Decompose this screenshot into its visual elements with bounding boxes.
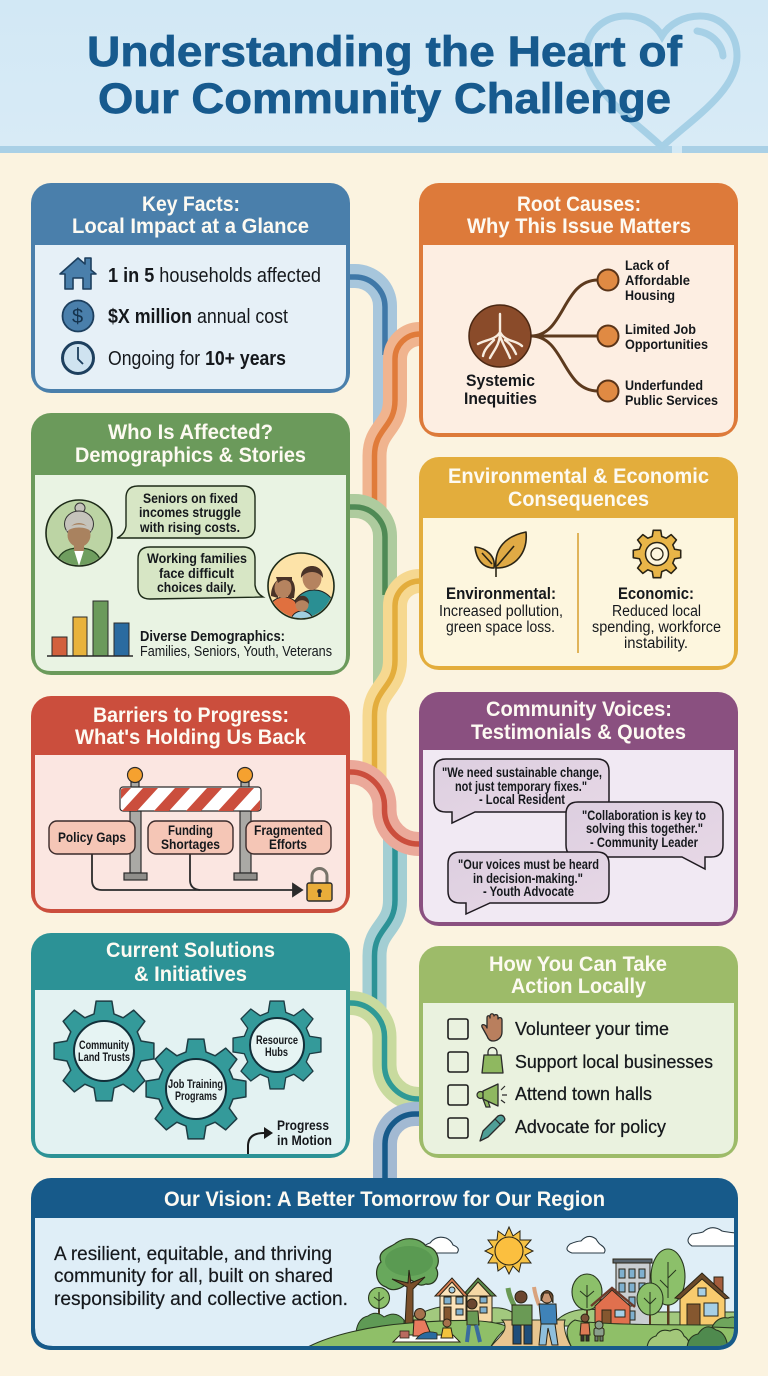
heading: vision: Our Vision: A Better Tomorrow for Our Region <box>164 1188 605 1211</box>
icon: leaves <box>475 532 526 577</box>
heading: current solutions <box>106 939 275 986</box>
connector: root causes orange <box>374 334 421 510</box>
bush left <box>356 1313 404 1332</box>
small tree right <box>637 1283 663 1325</box>
divider <box>577 533 579 653</box>
heading: key facts <box>72 193 309 238</box>
tall tree <box>651 1249 685 1327</box>
quote: local resident: "We need sustainable change, <box>442 765 602 780</box>
connector: solutions teal <box>374 838 395 1012</box>
label: policy gaps: Policy Gaps <box>58 829 126 845</box>
title: Understanding the Heart of <box>87 28 683 76</box>
heading: environmental and economic <box>448 465 709 511</box>
speech bubble: families: Working families <box>147 550 247 566</box>
quote: youth advocate: - Youth Advocate <box>483 884 574 899</box>
fact: annual cost: $X million annual cost <box>108 306 288 328</box>
gear: job training programs: Job Training <box>168 1079 223 1091</box>
label: policy gaps <box>49 821 135 854</box>
quote: youth advocate: "Our voices must be heard <box>458 857 599 872</box>
cause: jobs: Limited Job <box>625 321 696 337</box>
label: progress in motion: Progress <box>277 1117 329 1133</box>
quote: community leader: - Community Leader <box>590 835 699 850</box>
heading: barriers <box>75 704 306 749</box>
heading: environmental and economic: Environmental & Economic <box>448 465 709 488</box>
heading: community voices <box>471 698 686 744</box>
cause: services <box>625 377 718 408</box>
action: volunteer <box>448 1014 669 1041</box>
child and dog <box>580 1314 604 1341</box>
panel: community voices <box>419 692 738 926</box>
heading: barriers: Barriers to Progress: <box>93 704 289 727</box>
action: attend town halls <box>448 1083 652 1107</box>
cause: housing: Lack of <box>625 257 669 273</box>
heading: community voices: Community Voices: <box>486 698 672 721</box>
heading: barriers: What's Holding Us Back <box>75 726 306 749</box>
label: progress in motion <box>277 1117 332 1148</box>
connector: barriers red <box>348 772 421 844</box>
walking person <box>467 1299 480 1342</box>
text: vision statement: A resilient, equitable, and thriving <box>54 1243 332 1265</box>
icon: dollar: $ <box>72 306 83 328</box>
cause: housing <box>625 257 690 303</box>
quote: youth advocate: in decision-making." <box>473 871 583 886</box>
panel: barriers <box>31 696 350 913</box>
cause: housing: Housing <box>625 287 675 303</box>
text: economic <box>592 584 721 652</box>
heading: who is affected <box>75 421 306 467</box>
speech bubble: seniors <box>117 486 255 538</box>
picnic family <box>393 1308 460 1342</box>
label: fragmented efforts <box>246 821 331 854</box>
large tree <box>377 1239 438 1325</box>
footpath <box>490 1320 572 1348</box>
gear: community land trusts: Land Trusts <box>78 1052 130 1064</box>
fact: households: 1 in 5 households affected <box>108 265 321 287</box>
text: environmental: Environmental: <box>446 584 556 603</box>
text: economic: Economic: <box>618 584 694 603</box>
speech bubble: families: face difficult <box>159 565 234 581</box>
connector: action pale green <box>348 1003 421 1099</box>
text: economic: Reduced local <box>612 603 701 620</box>
caption: diverse demographics: Diverse Demographics: <box>140 628 285 645</box>
text: environmental <box>439 584 563 636</box>
heading: take action: How You Can Take <box>489 953 667 976</box>
text: environmental: green space loss. <box>446 619 555 636</box>
sun <box>485 1227 533 1274</box>
icon: clock <box>62 342 94 374</box>
gear: community land trusts <box>54 1001 154 1101</box>
gear: job training programs: Programs <box>175 1091 217 1103</box>
action: advocate <box>448 1115 667 1141</box>
node: jobs <box>598 326 618 346</box>
speech bubble: seniors: Seniors on fixed <box>143 490 238 506</box>
icon: house <box>60 258 96 289</box>
label: systemic inequities: Inequities <box>464 389 537 408</box>
lawns <box>306 1320 736 1348</box>
speech bubble: seniors: incomes struggle <box>139 504 241 520</box>
icon: dollar <box>62 300 94 332</box>
fact: duration: Ongoing for 10+ years <box>108 348 286 370</box>
heading: take action <box>489 953 667 998</box>
heading: current solutions: Current Solutions <box>106 939 275 962</box>
panel: vision <box>31 1178 738 1350</box>
label: funding shortages <box>148 821 233 854</box>
title: Our Community Challenge <box>98 75 671 123</box>
icon: padlock <box>307 868 332 901</box>
header banner <box>0 0 768 153</box>
heading: community voices: Testimonials & Quotes <box>471 721 686 744</box>
text: economic: instability. <box>624 635 688 652</box>
heading: key facts: Key Facts: <box>142 193 240 216</box>
speech bubble: seniors: with rising costs. <box>139 519 240 535</box>
heading: take action: Action Locally <box>511 975 646 998</box>
action: support businesses <box>448 1048 713 1073</box>
label: funding shortages: Funding <box>168 822 213 838</box>
heading: key facts: Local Impact at a Glance <box>72 215 309 238</box>
illustration: thriving neighbourhood <box>306 1227 736 1348</box>
panel: root causes <box>419 183 738 437</box>
quote: local resident <box>434 759 609 823</box>
gear: job training programs <box>146 1039 246 1139</box>
bushes right <box>647 1317 736 1348</box>
connector: vision navy <box>385 1114 421 1182</box>
panel: current solutions <box>31 933 350 1158</box>
icon: family portrait <box>267 552 335 620</box>
cause: jobs: Opportunities <box>625 336 708 352</box>
flow lines to lock <box>92 854 302 896</box>
cause: services: Public Services <box>625 392 718 408</box>
label: systemic inequities: Systemic <box>466 371 535 390</box>
arrow: progress <box>248 1127 273 1154</box>
label: systemic inequities <box>464 371 537 408</box>
panel: environmental and economic <box>419 457 738 670</box>
label: fragmented efforts: Fragmented <box>254 822 323 838</box>
back hills <box>404 1306 734 1326</box>
icon: senior portrait <box>46 500 112 566</box>
quote: community leader: "Collaboration is key to <box>582 808 706 823</box>
action: advocate: Advocate for policy <box>515 1116 667 1137</box>
text: vision statement: responsibility and collective action. <box>54 1288 348 1310</box>
icon: gear <box>633 530 681 578</box>
speech bubble: families: choices daily. <box>157 579 236 595</box>
heading: environmental and economic: Consequences <box>508 488 649 511</box>
gear: resource hubs <box>233 1001 321 1089</box>
cause: housing: Affordable <box>625 272 690 288</box>
label: fragmented efforts: Efforts <box>269 836 307 852</box>
waving people <box>508 1287 558 1345</box>
panel: key facts <box>31 183 350 393</box>
vision panel lower border <box>33 1218 736 1348</box>
connector: environmental yellow <box>374 581 421 778</box>
icon: heart outline <box>586 16 737 147</box>
cause: jobs <box>625 321 708 352</box>
gear: resource hubs: Resource <box>256 1035 298 1047</box>
heading: who is affected: Who Is Affected? <box>108 421 273 444</box>
quote: community leader: solving this together." <box>586 821 703 836</box>
quote: youth advocate <box>448 852 609 914</box>
yellow house <box>675 1273 729 1325</box>
quote: community leader <box>566 802 723 869</box>
text: vision statement <box>54 1243 348 1310</box>
diagram: branches <box>531 280 598 391</box>
heading: root causes: Root Causes: <box>517 193 641 216</box>
label: progress in motion: in Motion <box>277 1132 332 1148</box>
connector: key facts blue <box>348 276 385 428</box>
heading: who is affected: Demographics & Stories <box>75 444 306 467</box>
heading: current solutions: & Initiatives <box>134 963 247 986</box>
middle tree <box>572 1274 602 1325</box>
clouds <box>424 1228 736 1253</box>
bar chart: demographics <box>47 601 133 656</box>
panel: take action <box>419 946 738 1158</box>
quote: local resident: not just temporary fixes." <box>455 779 587 794</box>
heading: root causes: Why This Issue Matters <box>467 215 691 238</box>
caption: diverse demographics <box>140 628 332 660</box>
gear: resource hubs: Hubs <box>265 1047 288 1059</box>
title <box>87 28 683 123</box>
text: vision statement: community for all, built on shared <box>54 1265 333 1287</box>
icon: road barricade <box>120 768 261 880</box>
caption: diverse demographics: Families, Seniors, Youth, Veterans <box>140 644 332 660</box>
cause: services: Underfunded <box>625 377 703 393</box>
text: economic: spending, workforce <box>592 619 721 636</box>
red house <box>591 1288 635 1325</box>
icon: roots <box>469 305 531 367</box>
action: attend town halls: Attend town halls <box>515 1083 652 1104</box>
houses cream <box>435 1278 496 1322</box>
speech bubble: families <box>138 547 263 599</box>
apartment building <box>613 1259 652 1325</box>
gear: community land trusts: Community <box>79 1040 129 1052</box>
heading: root causes <box>467 193 691 238</box>
quote: local resident: - Local Resident <box>479 792 565 807</box>
small tree left <box>368 1288 390 1320</box>
node: services <box>598 380 618 402</box>
node: housing <box>598 270 618 290</box>
connector: who is affected green <box>348 506 385 689</box>
action: volunteer: Volunteer your time <box>515 1018 669 1039</box>
connector ribbons <box>348 276 421 1182</box>
text: environmental: Increased pollution, <box>439 603 563 620</box>
label: funding shortages: Shortages <box>161 836 220 852</box>
action: support businesses: Support local businesses <box>515 1051 713 1072</box>
panel: who is affected <box>31 413 350 675</box>
